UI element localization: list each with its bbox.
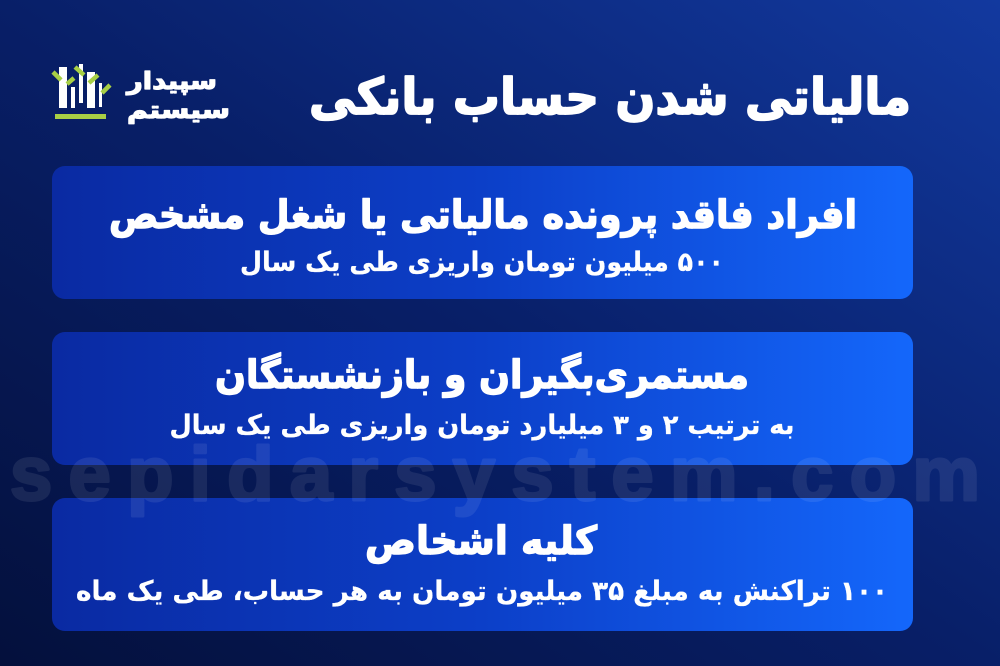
logo text: سیستم — [127, 96, 230, 124]
panel: all persons — [52, 498, 913, 631]
panel text: ۵۰۰ میلیون تومان واریزی طی یک سال — [240, 247, 724, 278]
watermark: sepidarsystem.com — [10, 432, 980, 517]
panel: pensioners and retirees — [52, 332, 913, 465]
panel text: ۱۰۰ تراکنش به مبلغ ۳۵ میلیون تومان به هر حساب، طی یک ماه — [76, 576, 888, 607]
logo text — [126, 67, 230, 124]
icon: logo bars — [53, 64, 110, 119]
panel heading: افراد فاقد پرونده مالیاتی یا شغل مشخص — [109, 193, 857, 238]
panel text: به ترتیب ۲ و ۳ میلیارد تومان واریزی طی یک سال — [169, 410, 794, 441]
logo — [53, 64, 230, 124]
logo text: سپیدار — [126, 67, 217, 95]
panel heading: مستمری‌بگیران و بازنشستگان — [215, 352, 749, 398]
panel heading: کلیه اشخاص — [365, 519, 597, 564]
panel: people without a tax file — [52, 166, 913, 299]
title: مالیاتی شدن حساب بانکی — [309, 68, 911, 126]
